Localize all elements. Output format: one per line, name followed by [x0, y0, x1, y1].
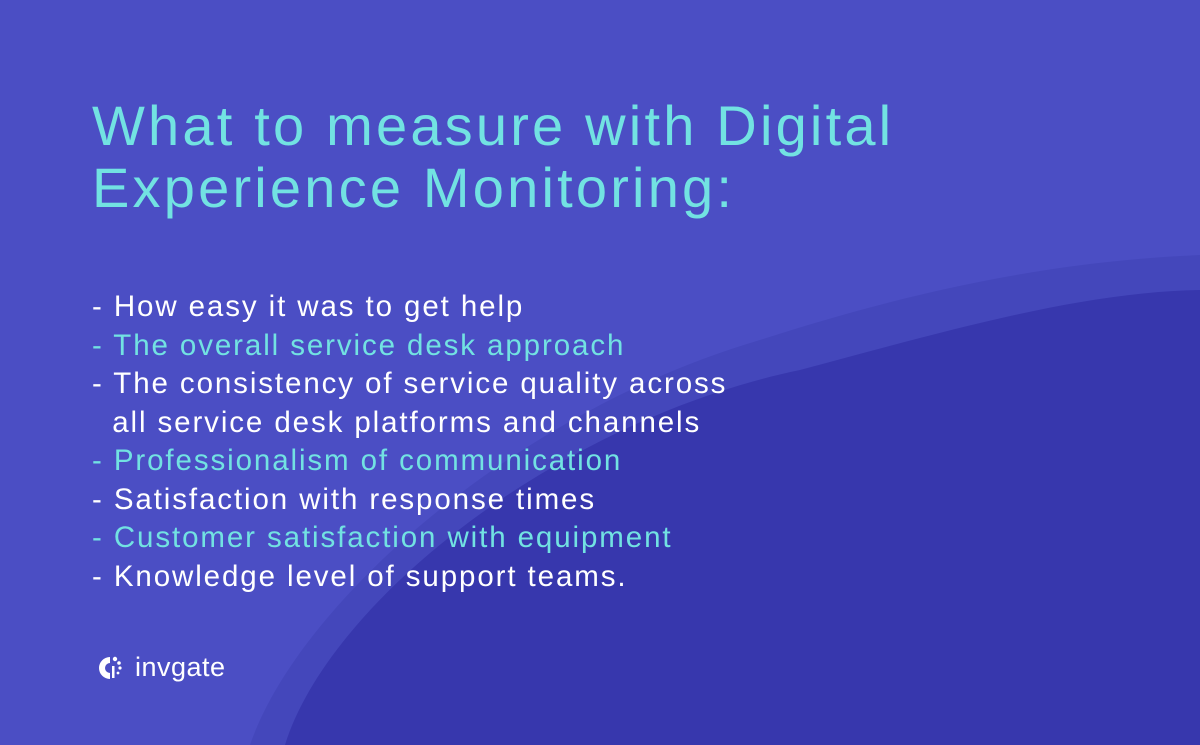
list of measures: - Professionalism of communication: [92, 444, 622, 477]
list of measures: - Customer satisfaction with equipment: [92, 521, 672, 554]
logo: invgate: invgate: [135, 652, 226, 682]
title: What to measure with Digital: [92, 94, 894, 157]
title: Experience Monitoring:: [92, 156, 735, 219]
list of measures: - The consistency of service quality across: [92, 367, 727, 400]
list of measures: - Satisfaction with response times: [92, 482, 596, 516]
list of measures: [92, 290, 727, 592]
list of measures: - The overall service desk approach: [92, 328, 625, 362]
title: [92, 94, 894, 219]
list of measures: - Knowledge level of support teams.: [92, 560, 627, 592]
list of measures: all service desk platforms and channels: [112, 406, 701, 438]
list of measures: - How easy it was to get help: [92, 290, 524, 323]
icon: invgate mark: [99, 656, 122, 679]
